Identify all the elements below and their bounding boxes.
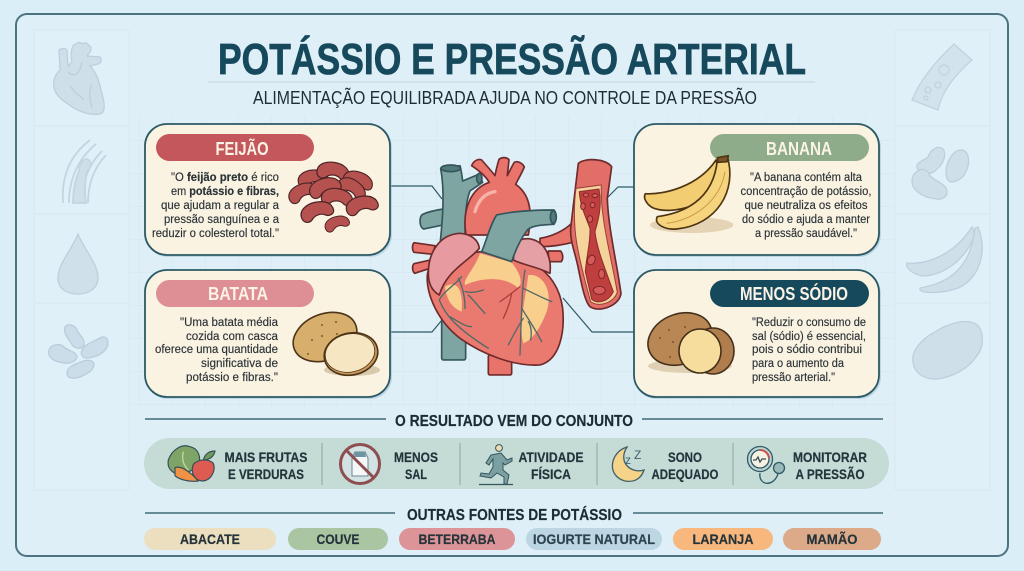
text: banana: a pressão saudável." [755,228,857,240]
icon: faint heart [54,42,104,114]
heading pill: feijão: FEIJÃO [216,138,268,159]
text: feijão: que ajudam a regular a [161,200,280,212]
text: feijão: pressão sanguínea e a [164,214,280,226]
text: batata: oferece uma quantidade [155,344,278,356]
chips: other potassium sources [144,528,881,550]
icon: faint beans right [912,147,969,199]
text: monitorar a pressão [793,450,867,482]
heading pill: banana: BANANA [766,139,832,159]
text: feijão: "O feijão preto é rico [171,172,279,184]
text: feijão: em potássio e fibras, [171,186,279,198]
icon: faint beans [49,325,108,378]
icon: potato and cut slice [640,303,734,375]
panel: menos sódio [634,270,881,399]
heading pill: menos sódio: MENOS SÓDIO [740,283,848,304]
text: batata: "Uma batata média [180,317,279,329]
text: batata: potássio e fibras." [186,372,278,384]
title: POTÁSSIO E PRESSÃO ARTERIAL [218,34,806,84]
artery tube [571,160,621,309]
section heading: o resultado vem do conjunto: O RESULTADO VEM DO CONJUNTO [395,413,633,430]
text: banana: "A banana contém alta [750,172,863,184]
icon: faint artery [63,140,106,203]
text: banana [740,172,872,240]
heading pill: banana [710,134,869,161]
text: banana: do sódio e ajuda a manter [742,214,870,226]
connector lines [390,186,634,332]
heart body [427,252,563,365]
text: sono adequado: SONO [668,450,702,465]
text: batata: cozida com casca [186,331,279,343]
text: menos sódio: "Reduzir o consumo de [752,317,866,329]
icon: faint potato [913,322,982,379]
section heading: outras fontes de potássio: OUTRAS FONTES DE POTÁSSIO [407,507,622,524]
coronary vessels [439,270,552,355]
chip: mamão: MAMÃO [806,530,858,547]
right decorative icon column [895,30,990,490]
text: batata: significativa de [201,358,278,370]
heading pill: batata: BATATA [208,284,268,304]
text: monitorar a pressão: A PRESSÃO [796,467,864,482]
chip: mamão [783,528,881,550]
text: atividade física: ATIVIDADE [518,450,584,465]
icon: moon and zz [612,447,644,481]
chip: couve [288,528,388,550]
chip: laranja: LARANJA [692,531,754,547]
text: atividade física [518,450,584,482]
icon: no salt [340,444,380,484]
text: menos sódio [752,317,866,384]
strip: habits [144,438,889,489]
icon: moon and zz: z [625,453,631,467]
text: menos sódio: para o aumento da [752,358,845,370]
pulmonary artery [482,210,556,262]
subtitle: ALIMENTAÇÃO EQUILIBRADA AJUDA NO CONTROLE DA PRESSÃO [253,87,757,108]
text: mais frutas: E VERDURAS [228,467,304,482]
text: menos sal: MENOS [394,450,438,465]
text: menos sódio: sal (sódio) é essencial, [752,331,866,343]
text: sono adequado: ADEQUADO [652,467,718,482]
panel: feijão [145,124,392,257]
left decorative icon column [34,30,129,490]
text: atividade física: FÍSICA [531,467,571,482]
icon: potato with cut half [286,303,382,380]
text: sono adequado [652,450,718,482]
heading pill: menos sódio [710,280,869,307]
heading pill: feijão [156,134,314,161]
icon: faint banana [907,227,982,293]
icon: moon and zz: Z [634,448,641,462]
chip: laranja [673,528,773,550]
chip: abacate: ABACATE [180,531,240,547]
panel: batata [145,270,392,399]
chip: beterraba: BETERRABA [418,531,496,547]
chip: abacate [144,528,276,550]
illustration: heart and artery [412,158,621,375]
icon: bananas [645,156,733,233]
heading pill: batata [156,280,314,307]
text: mais frutas [224,450,308,482]
panel: banana [634,124,881,257]
icon: kidney beans [286,161,379,233]
text: batata [155,317,279,384]
icon: faint water drop [58,234,98,294]
text: menos sódio: pressão arterial." [752,372,835,384]
chip: iogurte natural [526,528,662,550]
red stubs [412,223,575,375]
text: menos sal [394,450,438,482]
text: banana: que neutraliza os efeitos [744,200,868,212]
chip: iogurte natural: IOGURTE NATURAL [533,531,655,547]
left atrium [428,233,479,295]
icon: blood pressure monitor [748,446,784,483]
fat patches [445,253,549,343]
aorta [465,158,530,235]
text: banana: concentração de potássio, [740,186,872,198]
text: menos sal: SAL [405,467,427,482]
chip: couve: COUVE [316,531,360,547]
vena cava [420,165,483,360]
text: feijão: reduzir o colesterol total." [152,228,279,240]
text: feijão [152,172,280,240]
icon: faint blood vessel [912,44,972,110]
chip: beterraba [399,528,515,550]
right atrium [513,239,550,273]
icon: runner [479,445,513,484]
icon: fruits and vegetables [168,446,215,481]
text: menos sódio: pois o sódio contribui [752,344,862,356]
text: monitorar a pressão: MONITORAR [793,450,867,465]
text: mais frutas: MAIS FRUTAS [224,450,308,465]
